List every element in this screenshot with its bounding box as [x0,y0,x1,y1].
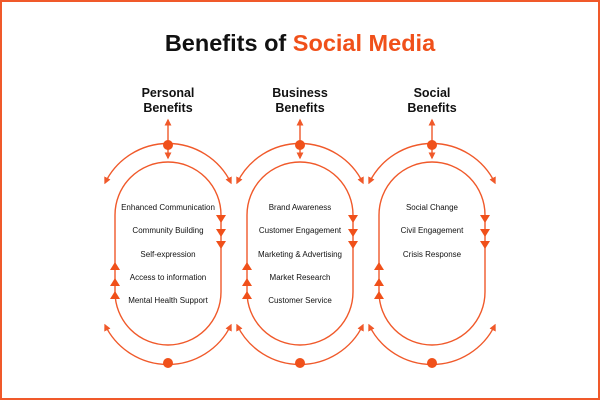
items: Civil Engagement [401,226,464,235]
items: Self-expression [140,250,196,259]
items [121,203,215,305]
items: Marketing & Advertising [258,250,342,259]
items: Crisis Response [403,250,462,259]
items: Customer Service [268,296,332,305]
items: Mental Health Support [128,296,209,305]
panel: social benefits [369,86,495,368]
items: Enhanced Communication [121,203,215,212]
heading: social: Social [414,86,450,100]
panel: personal benefits [105,86,231,368]
heading: personal: Personal [142,86,194,100]
title: Benefits of Social Media [165,30,436,56]
items: Market Research [270,273,330,282]
heading: business: Business [272,86,328,100]
connectors [237,120,363,364]
items: Customer Engagement [259,226,342,235]
connectors [369,120,495,364]
items: Social Change [406,203,459,212]
panel: business benefits [237,86,363,368]
items: Community Building [132,226,204,235]
connectors [105,120,231,364]
items [258,203,342,305]
heading: social: Benefits [407,101,457,115]
heading: business: Benefits [275,101,325,115]
items: Brand Awareness [269,203,331,212]
items: Access to information [130,273,206,282]
heading: personal: Benefits [143,101,193,115]
items [401,203,464,259]
